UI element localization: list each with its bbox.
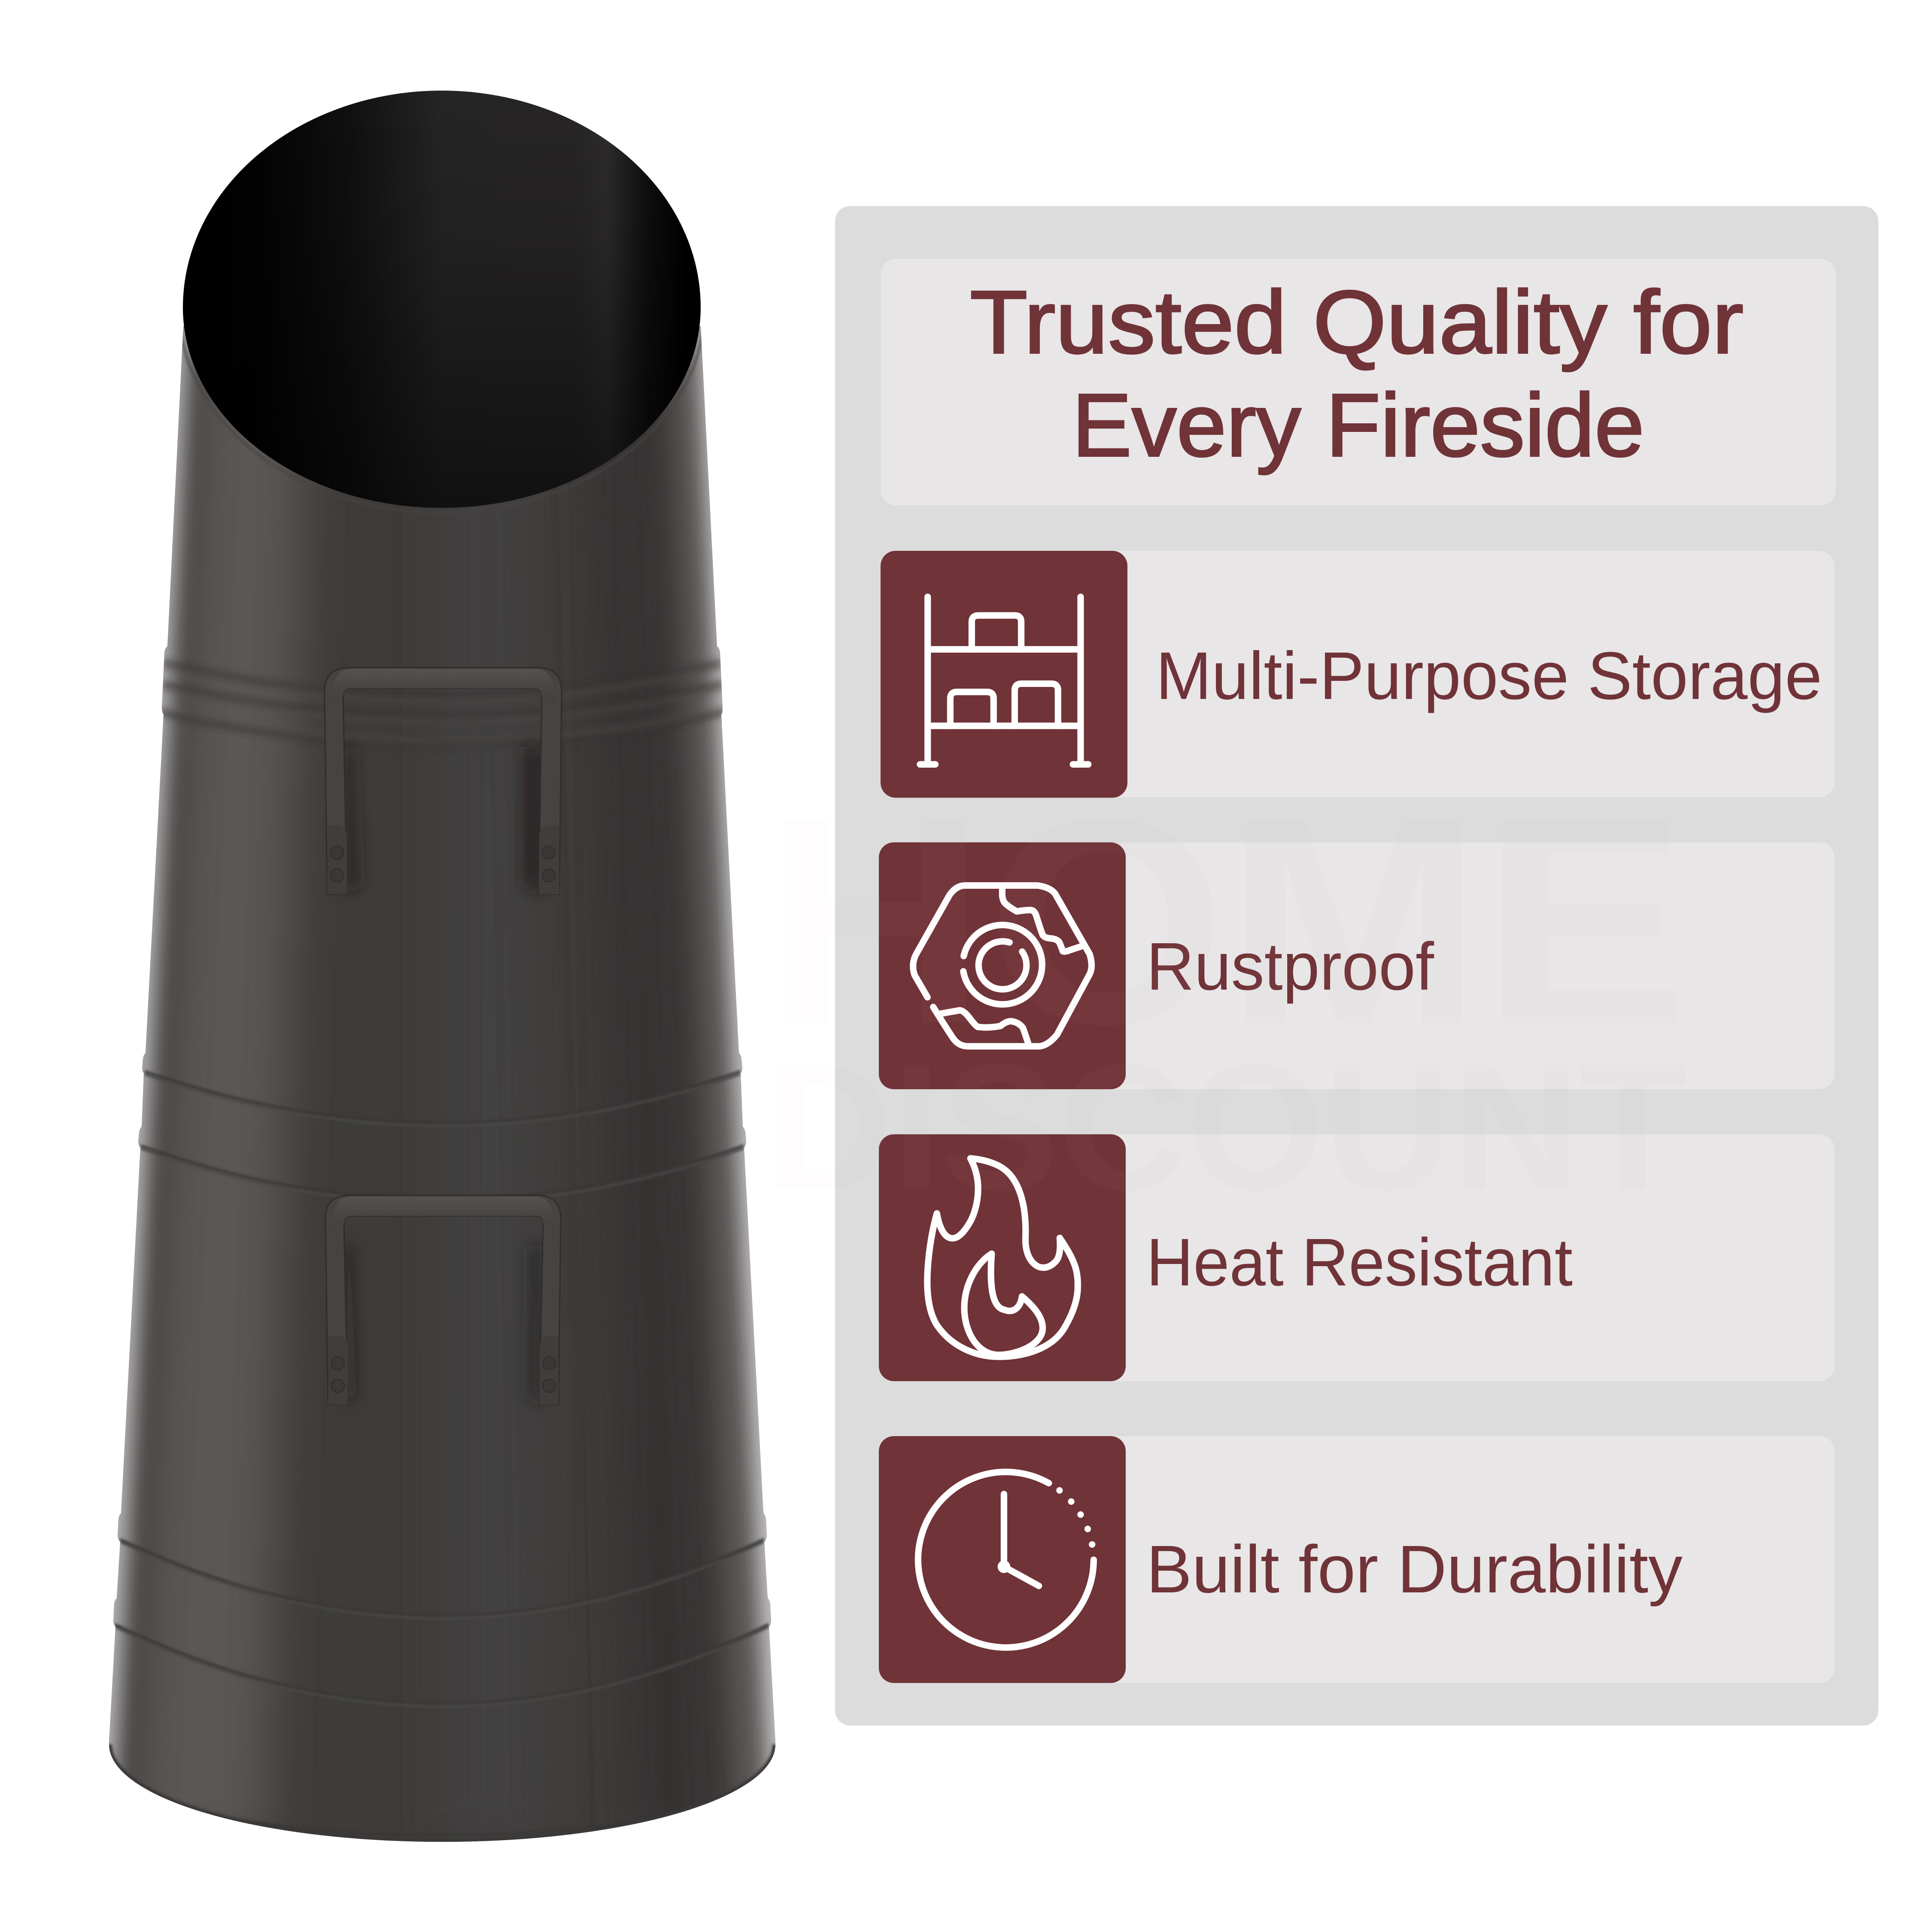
watermark: DISCOUNT <box>764 1027 1687 1228</box>
feature row: heat resistant <box>879 1134 1835 1381</box>
handle shadows <box>343 747 543 1406</box>
product: black coal hod bucket <box>77 91 816 1889</box>
label: Multi-Purpose Storage <box>1156 638 1822 714</box>
heading box <box>881 259 1836 505</box>
panel: feature list <box>764 206 1878 1725</box>
label: Rustproof <box>1146 929 1434 1004</box>
lower handle <box>325 1195 561 1405</box>
feature row: rustproof <box>879 842 1835 1089</box>
groove bands <box>109 104 775 1842</box>
label: Built for Durability <box>1146 1532 1683 1607</box>
icon tile: clock <box>879 1436 1126 1683</box>
ribs under upper handle <box>160 661 724 745</box>
title: Trusted Quality for <box>970 273 1744 372</box>
label: Heat Resistant <box>1146 1225 1573 1300</box>
bucket body <box>109 326 775 1842</box>
feature row: multi-purpose storage <box>881 551 1835 798</box>
icon tile: flame <box>879 1134 1126 1381</box>
panel background <box>835 206 1878 1725</box>
icon tile: rusted nut <box>879 842 1126 1089</box>
watermark: HOME <box>764 759 1687 1085</box>
icon tile: shelving <box>881 551 1127 798</box>
upper handle <box>325 668 562 894</box>
feature row: built for durability <box>879 1436 1835 1683</box>
title: Every Fireside <box>1072 376 1644 475</box>
bucket opening <box>183 91 701 508</box>
watermark <box>764 759 1687 1228</box>
